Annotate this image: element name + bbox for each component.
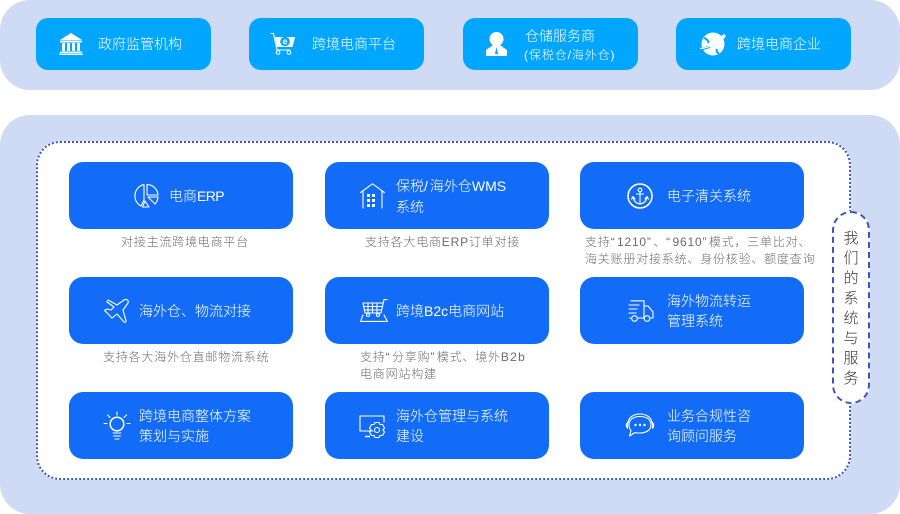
label: 海外仓管理与系统	[396, 408, 508, 424]
icon: cart on keyboard	[360, 299, 388, 322]
label	[396, 178, 506, 215]
label: 电商ERP	[169, 188, 224, 204]
button: government regulators	[36, 18, 211, 70]
card: overseas logistics transfer management	[580, 277, 804, 344]
label: 海外物流转运	[667, 293, 751, 309]
side label: our systems and services: 务	[843, 370, 858, 387]
card: bonded warehouse WMS	[325, 162, 549, 229]
card: electronic customs clearance	[580, 162, 804, 229]
icon: pie chart	[134, 184, 158, 208]
icon: headset chat	[626, 414, 654, 437]
card: warehouse management construction	[325, 392, 549, 459]
label: 建设	[396, 428, 424, 444]
label: 保税/海外仓WMS	[396, 178, 506, 194]
label: 策划与实施	[139, 428, 209, 444]
note: logistics: 支持各大海外仓直邮物流系统	[103, 350, 269, 364]
button: e-commerce platforms	[249, 18, 424, 70]
note: customs: 支持“1210”、“9610”模式，三单比对、	[585, 235, 811, 249]
label: 跨境电商平台	[312, 36, 396, 52]
label: 系统	[396, 199, 424, 215]
icon: light bulb	[104, 412, 130, 440]
label	[396, 408, 508, 444]
label: 业务合规性咨	[667, 408, 751, 424]
note: B2c: 支持“分享购”模式、境外B2b	[360, 350, 526, 364]
note: B2c	[360, 350, 526, 381]
icon: globe and plane	[700, 32, 726, 56]
icon: shopping cart with e	[270, 33, 295, 55]
label: 管理系统	[667, 313, 723, 329]
card: overseas warehouse and logistics	[69, 277, 293, 344]
side label: our systems and services: 的	[843, 270, 858, 287]
label	[667, 408, 751, 444]
button: warehouse service providers	[463, 18, 638, 70]
side label: our systems and services: 我	[843, 230, 858, 247]
label: 跨境电商企业	[737, 36, 821, 52]
label	[667, 293, 751, 329]
label: 跨境B2c电商网站	[396, 303, 504, 319]
side label: our systems and services	[832, 211, 870, 404]
card: overall solution planning	[69, 392, 293, 459]
label: 电子清关系统	[667, 188, 751, 204]
card: B2c website	[325, 277, 549, 344]
note: customs	[585, 235, 815, 266]
side label: our systems and services: 系	[843, 290, 858, 307]
button: cross-border enterprises	[676, 18, 851, 70]
panel: systems and services	[0, 115, 900, 514]
side label: our systems and services: 与	[843, 330, 858, 347]
note: ERP: 对接主流跨境电商平台	[121, 235, 249, 249]
note: WMS: 支持各大电商ERP订单对接	[365, 235, 520, 249]
icon: anchor	[627, 183, 653, 209]
side label: our systems and services: 服	[843, 350, 858, 367]
label: 政府监管机构	[98, 36, 182, 52]
icon: delivery truck	[628, 300, 654, 322]
icon: government building	[59, 33, 83, 55]
card: e-commerce ERP	[69, 162, 293, 229]
label	[139, 408, 251, 444]
note: customs: 海关账册对接系统、身份核验、额度查询	[585, 252, 815, 266]
label: 跨境电商整体方案	[139, 408, 251, 424]
panel: top participants	[0, 0, 900, 90]
icon: plane outline	[104, 298, 129, 323]
label: 询顾问服务	[667, 428, 737, 444]
note: B2c: 电商网站构建	[360, 367, 437, 381]
side label: our systems and services: 们	[843, 250, 858, 267]
sublabel: (保税仓/海外仓)	[524, 48, 615, 62]
side label: our systems and services: 统	[843, 310, 858, 327]
icon: monitor and gear	[359, 416, 386, 438]
dashed white container	[36, 141, 851, 480]
icon: businessman	[486, 32, 507, 56]
label: 海外仓、物流对接	[139, 303, 251, 319]
label: 仓储服务商	[525, 28, 595, 44]
icon: warehouse house	[360, 183, 385, 208]
icon: shopping cart with e: e	[282, 36, 288, 46]
card: compliance consulting	[580, 392, 804, 459]
